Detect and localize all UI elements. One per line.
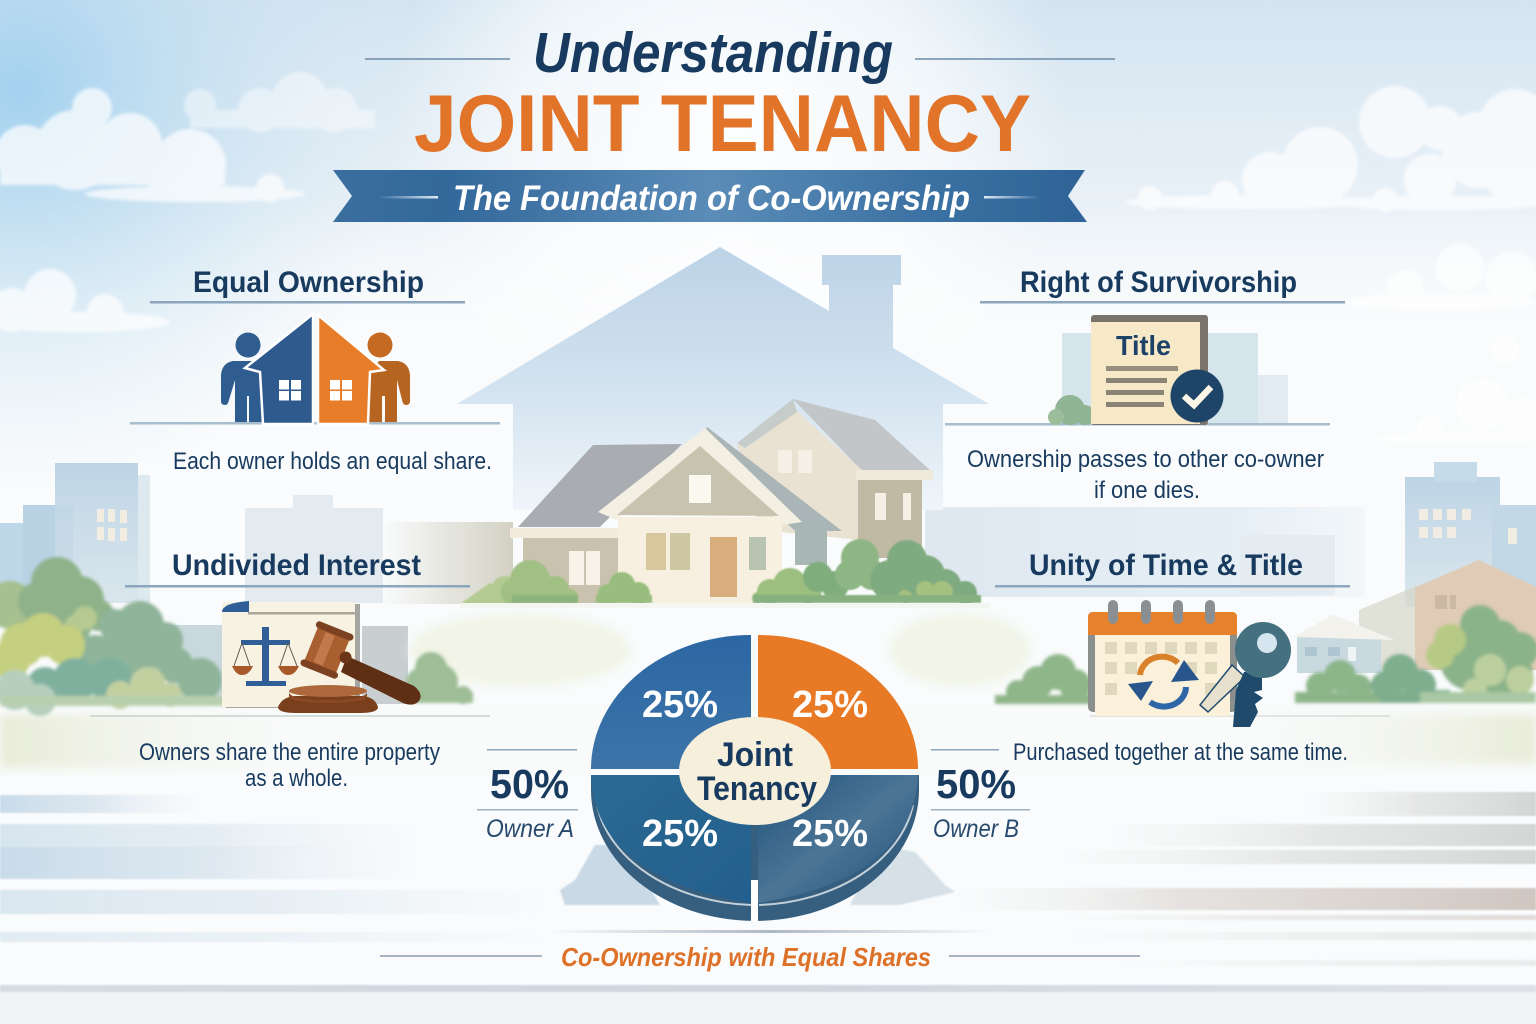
subtitle ribbon: [333, 170, 1087, 222]
pie slice: bottom-right 25%: 25%: [792, 813, 868, 855]
pie slice: top-right 25%: [758, 635, 918, 769]
distant skyline right: [925, 462, 1536, 673]
pie slice: top-left 25%: [591, 635, 751, 769]
left trees: [0, 557, 473, 716]
pie center label: Tenancy: [697, 770, 817, 808]
distant skyline left: [0, 463, 513, 704]
icon: title document with check: [1048, 315, 1288, 425]
description: undivided interest: Owners share the entire property: [139, 739, 440, 766]
bushes: [460, 539, 981, 606]
callout: owner A 50%: [477, 749, 578, 843]
title: Joint Tenancy: JOINT TENANCY: [414, 79, 1031, 169]
callout: owner B 50%: 50%: [936, 761, 1016, 807]
central watercolor house: [460, 399, 990, 608]
pie slice: bottom-left 25%: 25%: [642, 813, 718, 855]
panel: undivided interest: [125, 549, 470, 792]
heading: undivided interest: Undivided Interest: [172, 549, 421, 582]
pie slice: top-right 25%: 25%: [792, 684, 868, 726]
description: right of survivorship: Ownership passes to other co-owner: [967, 446, 1324, 473]
heading: right of survivorship: Right of Survivorship: [1020, 266, 1297, 299]
callout: owner A 50%: 50%: [490, 761, 569, 807]
description: unity of time and title: Purchased together at the same time.: [1013, 739, 1348, 766]
subtitle ribbon: The Foundation of Co-Ownership: [453, 179, 970, 218]
clouds: [0, 86, 1536, 444]
heading: equal ownership: Equal Ownership: [193, 266, 424, 299]
callout: owner B 50%: Owner B: [933, 815, 1019, 843]
ground wash: [410, 614, 1030, 686]
field stripes: [0, 792, 1536, 1024]
pie slice: bottom-right 25%: [758, 775, 918, 903]
pie slice: top-left 25%: 25%: [642, 684, 718, 726]
description: right of survivorship: if one dies.: [1094, 477, 1200, 504]
icon: calendar with cycle arrows and key: [1088, 600, 1291, 727]
panel: equal ownership: [130, 266, 500, 475]
icon: two people sharing a house: [221, 314, 410, 424]
description: undivided interest: [139, 739, 440, 792]
pie center label: Joint: [717, 736, 793, 774]
footer caption: Co-Ownership with Equal Shares: [561, 942, 931, 972]
background house silhouette: [457, 247, 989, 510]
description: undivided interest: as a whole.: [245, 765, 348, 792]
callout: owner A 50%: Owner A: [486, 815, 574, 843]
right trees: [995, 605, 1536, 704]
panel: unity of time and title: [995, 549, 1350, 766]
panel: right of survivorship: [945, 266, 1345, 504]
icon: title document with check: Title: [1116, 330, 1171, 361]
pie side wall: [591, 775, 919, 921]
description: equal ownership: Each owner holds an equal share.: [173, 448, 492, 475]
title: Understanding: Understanding: [533, 21, 893, 85]
heading: unity of time and title: Unity of Time & Title: [1029, 549, 1303, 582]
callout: owner B 50%: [931, 749, 1030, 843]
ground shadow lines: [90, 715, 490, 717]
pie slice: bottom-left 25%: [591, 775, 751, 903]
pie center label: [679, 717, 831, 825]
description: right of survivorship: [967, 446, 1324, 504]
footer caption: [380, 930, 1140, 972]
icon: deed with scales and gavel: [222, 601, 421, 713]
panel: ownership shares pie chart: [560, 635, 955, 922]
